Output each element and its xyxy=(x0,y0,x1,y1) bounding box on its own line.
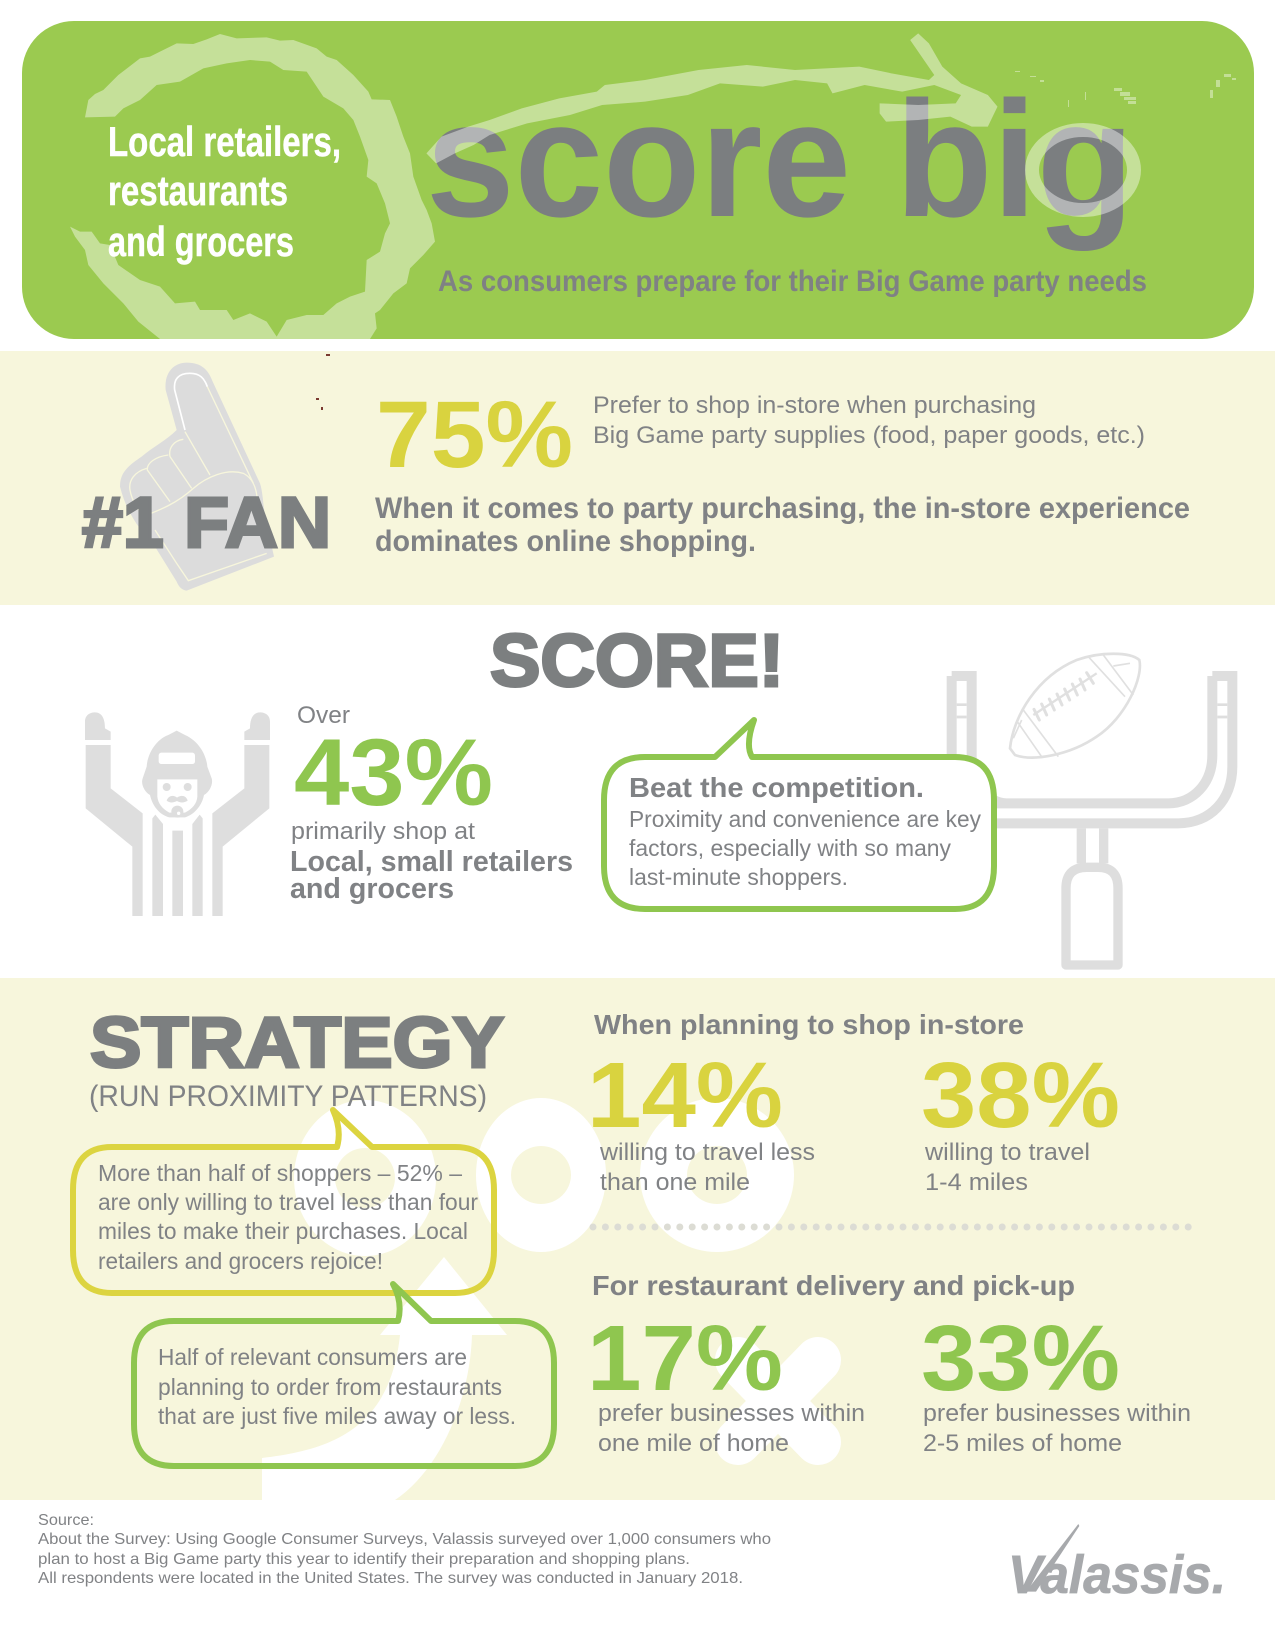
stat 38% description: willing to travel xyxy=(924,1139,1090,1166)
source note: Source: xyxy=(38,1512,94,1529)
chalk speckles xyxy=(1015,71,1236,107)
source note: plan to host a Big Game party this year to identify their preparation and shopping plans. xyxy=(38,1551,690,1568)
stat 43%: 43% xyxy=(294,720,493,826)
stat 33% description: prefer businesses within xyxy=(923,1400,1191,1427)
icon: football xyxy=(1010,654,1140,758)
icon: goal post xyxy=(952,676,1232,965)
stat description xyxy=(593,392,1145,449)
callout: restaurants xyxy=(134,1284,554,1466)
callout: restaurants: Half of relevant consumers are xyxy=(158,1344,467,1370)
strategy heading: STRATEGY xyxy=(90,1004,504,1083)
stat description: Local, small retailers xyxy=(290,846,573,878)
strategy subheading: (RUN PROXIMITY PATTERNS) xyxy=(89,1080,487,1113)
header left text: Local retailers, xyxy=(108,118,341,165)
stat 38% description xyxy=(924,1139,1090,1196)
source note: About the Survey: Using Google Consumer Surveys, Valassis surveyed over 1,000 consumers who xyxy=(38,1531,771,1548)
header title text: score big xyxy=(426,67,1134,251)
stat 33% description xyxy=(923,1400,1191,1457)
stat 17% description: one mile of home xyxy=(598,1430,789,1457)
icon: foam finger xyxy=(120,363,274,591)
header banner xyxy=(22,21,1254,339)
stat description: primarily shop at xyxy=(291,818,475,845)
background number shapes xyxy=(262,1098,818,1500)
panel: fan xyxy=(0,351,1275,605)
stat 14% description: willing to travel less xyxy=(599,1139,815,1166)
heading: in-store: When planning to shop in-store xyxy=(594,1009,1024,1040)
stat 14%: 14% xyxy=(587,1043,783,1147)
source note xyxy=(38,1512,771,1587)
stat 17% description: prefer businesses within xyxy=(598,1400,865,1427)
stat description: Prefer to shop in-store when purchasing xyxy=(593,392,1036,419)
panel: score xyxy=(85,619,1232,965)
callout: beat the competition: Proximity and convenience are key xyxy=(629,806,981,832)
callout: shoppers: More than half of shoppers – 52% – xyxy=(98,1160,462,1186)
callout: shoppers: are only willing to travel less than four xyxy=(98,1189,478,1215)
callout: beat the competition: factors, especially with so many xyxy=(629,835,951,861)
callout: shoppers: miles to make their purchases. Local xyxy=(98,1218,468,1244)
stat 33% description: 2-5 miles of home xyxy=(923,1430,1122,1457)
callout: restaurants: planning to order from restaurants xyxy=(158,1374,502,1400)
stat 38% description: 1-4 miles xyxy=(925,1169,1028,1196)
header left text xyxy=(108,118,341,265)
chalk swirl circle xyxy=(70,34,435,339)
fan takeaway: When it comes to party purchasing, the in-store experience xyxy=(375,492,1190,525)
panel: strategy xyxy=(0,978,1275,1500)
stat 17%: 17% xyxy=(587,1306,783,1410)
stat 14% description: than one mile xyxy=(600,1169,750,1196)
score heading: SCORE! xyxy=(490,619,784,702)
logo: Valassis: Valassis. xyxy=(1008,1545,1226,1605)
callout: beat the competition: Beat the competition. xyxy=(629,772,924,803)
callout: shoppers: retailers and grocers rejoice! xyxy=(98,1248,383,1274)
stat description: Big Game party supplies (food, paper goods, etc.) xyxy=(593,422,1145,449)
stat label over: Over xyxy=(297,702,350,729)
stat 75%: 75% xyxy=(376,382,573,488)
stat description xyxy=(290,818,573,905)
callout: beat the competition xyxy=(604,720,994,909)
#1 fan heading: #1 FAN xyxy=(82,484,331,563)
icon: referee xyxy=(85,712,270,916)
callout: beat the competition: last-minute shoppers. xyxy=(629,864,848,890)
chalk loop around g xyxy=(1032,130,1134,210)
chalk arrow xyxy=(426,33,997,163)
stat 38%: 38% xyxy=(921,1043,1120,1147)
stat description: and grocers xyxy=(290,873,454,905)
header left text: and grocers xyxy=(108,218,294,265)
stat 17% description xyxy=(598,1400,865,1457)
callout: shoppers xyxy=(73,1110,494,1293)
stat 33%: 33% xyxy=(921,1306,1120,1410)
source note: All respondents were located in the United States. The survey was conducted in January 2018. xyxy=(38,1570,743,1587)
fan takeaway xyxy=(375,492,1190,558)
stat 14% description xyxy=(599,1139,815,1196)
specks xyxy=(316,354,330,410)
heading: restaurant: For restaurant delivery and pick-up xyxy=(592,1270,1075,1301)
header subtitle: As consumers prepare for their Big Game party needs xyxy=(438,265,1147,298)
fan takeaway: dominates online shopping. xyxy=(375,525,756,558)
callout: restaurants: that are just five miles away or less. xyxy=(158,1403,516,1429)
header left text: restaurants xyxy=(108,167,288,214)
